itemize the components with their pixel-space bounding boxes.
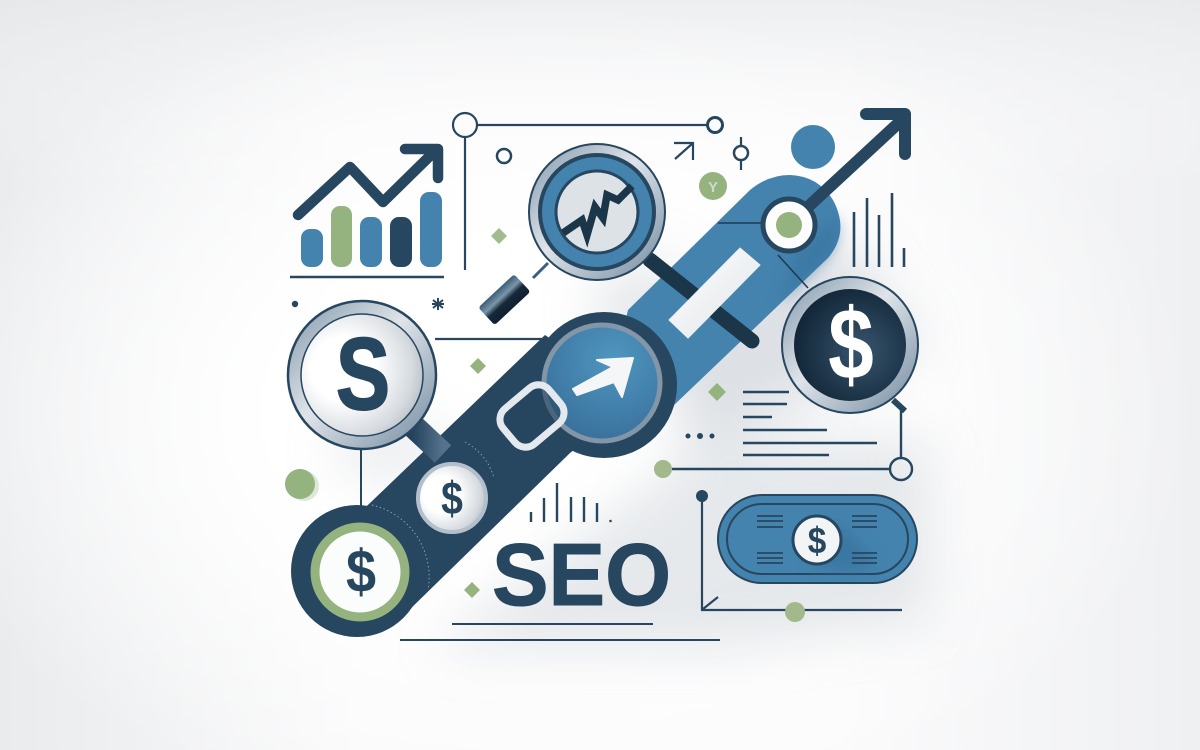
trend arrow (298, 149, 438, 215)
soft shadows (330, 240, 930, 650)
green badge with Y: Y (708, 179, 718, 196)
axis connector (696, 490, 902, 622)
magnifier: trend line (478, 144, 752, 341)
big dollar coin: $ (346, 538, 376, 606)
handle (650, 260, 752, 341)
small dollar coin: $ (441, 473, 463, 525)
chart bars (301, 192, 442, 267)
band node with green dot (763, 199, 815, 251)
text lines (743, 392, 877, 455)
band shadow detail (780, 215, 838, 305)
vertical bars right (854, 193, 904, 267)
bar chart with trend arrow (290, 149, 444, 277)
zigzag trend (563, 186, 632, 235)
magnifier: letter S (288, 301, 443, 454)
white slider bar (669, 248, 760, 338)
coin (793, 516, 841, 564)
magnifier: dollar dark (782, 277, 918, 413)
band node connectors (718, 223, 808, 288)
lens (288, 301, 436, 449)
connector under S (360, 449, 362, 506)
big dollar coin (291, 505, 423, 637)
green badge with Y (699, 172, 727, 200)
banknote pill (718, 495, 917, 583)
chain link (494, 379, 570, 453)
handle (412, 425, 443, 454)
dark diagonal band (352, 335, 640, 617)
white arrow (573, 358, 633, 397)
small dollar coin (418, 464, 486, 532)
lens (529, 144, 665, 280)
note line groups (757, 516, 877, 563)
right frame connector (672, 410, 912, 480)
title: SEO: SEO (492, 525, 671, 624)
small decorations (285, 137, 748, 598)
green connector dot (654, 460, 672, 478)
chart baseline (290, 276, 444, 278)
banknote pill: $ (808, 520, 827, 561)
dotted arcs on dark band (372, 442, 494, 590)
blue circle (791, 125, 835, 169)
lines under SEO (400, 624, 720, 640)
three dots (686, 433, 714, 439)
coin shadow (810, 520, 875, 572)
blue diagonal band (600, 175, 840, 430)
dollar sign: $ (828, 287, 874, 401)
top connector frame (435, 113, 722, 339)
handle fragment left (478, 263, 548, 325)
main growth arrow (810, 114, 905, 205)
blue arrow lens (531, 312, 677, 458)
letter: S (336, 317, 390, 431)
small bars above SEO (531, 483, 611, 522)
